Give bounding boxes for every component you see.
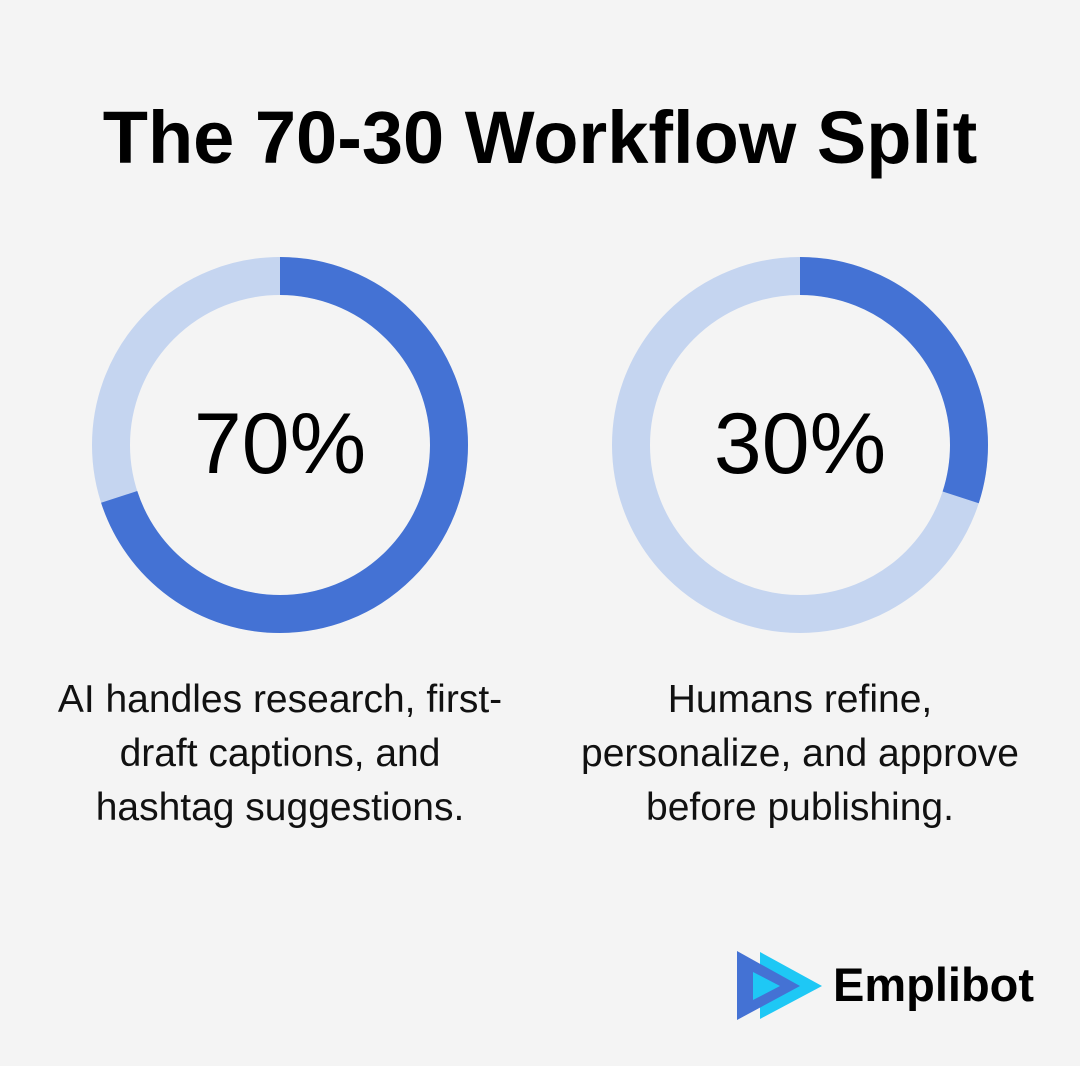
caption: humans: personalize, and approve <box>581 732 1019 775</box>
chart: 70% donut: 70% <box>194 396 366 492</box>
caption: humans: Humans refine, <box>668 678 932 721</box>
caption: humans <box>581 678 1019 829</box>
icon: play triangles <box>737 951 822 1020</box>
caption: humans: before publishing. <box>646 786 954 829</box>
logo text: Emplibot <box>833 958 1034 1011</box>
title: The 70-30 Workflow Split <box>103 96 977 179</box>
chart: 30% donut: 30% <box>714 396 886 492</box>
chart: 70% donut <box>92 257 468 633</box>
chart: 30% donut <box>612 257 988 633</box>
logo <box>737 951 1034 1020</box>
caption: AI <box>58 678 502 829</box>
caption: AI: draft captions, and <box>120 732 440 775</box>
caption: AI: AI handles research, first- <box>58 678 502 721</box>
caption: AI: hashtag suggestions. <box>96 786 464 829</box>
